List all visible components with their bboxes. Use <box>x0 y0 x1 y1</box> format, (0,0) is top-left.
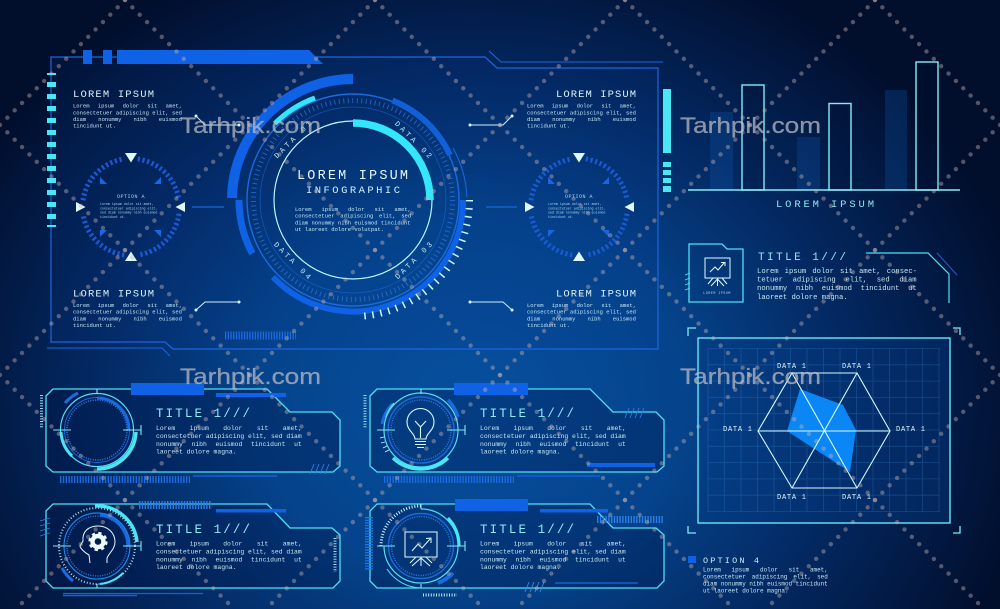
bottom hatch <box>225 332 296 340</box>
legend: option 4: consectetuer adipiscing elit, sed <box>703 574 828 580</box>
card 2 text: TITLE 1/// <box>156 523 250 537</box>
left tick column <box>47 73 56 227</box>
title and text: TITLE 1/// <box>758 252 846 264</box>
card 2 <box>40 504 340 596</box>
dial: option A left <box>76 153 185 261</box>
text block: top left: diam nonummy nibh euismod <box>73 116 182 123</box>
text block: top right <box>527 89 636 130</box>
card 2 text: Lorem ipsum dolor sit amet, <box>156 541 302 548</box>
dial triangles <box>525 153 634 261</box>
card 1 text: nonummy nibh euismod tincidunt ut <box>156 441 302 448</box>
legend: option 4: diam nonummy nibh euismod tincidunt <box>703 581 828 588</box>
icon: presentation board <box>405 532 437 566</box>
text block: bottom left: LOREM IPSUM <box>73 288 154 300</box>
card 1 dial <box>53 389 141 469</box>
card 3 text: Lorem ipsum dolor sit amet, <box>480 425 626 432</box>
watermark text: Tarhpik.com <box>680 364 821 389</box>
radar labels: DATA 1 <box>842 494 871 502</box>
card 3 text: laoreet dolore magna. <box>480 448 561 456</box>
title and text: nonummy nibh euismod tincidunt ut <box>757 285 917 293</box>
central circular gauge: INFOGRAPHIC <box>306 185 400 197</box>
gauge body text: ut laoreet dolore volutpat. <box>295 226 384 233</box>
card 3 text <box>480 407 626 456</box>
title and text: laoreet dolore magna. <box>757 294 848 302</box>
dial: option A right: tincidunt ut. <box>548 215 574 219</box>
card 2 text: nonummy nibh euismod tincidunt ut <box>156 556 302 563</box>
panel: main HUD frame <box>47 50 671 356</box>
dial: option A left: Lorem ipsum dolor sit amet, <box>100 202 153 206</box>
text block: bottom left: Lorem ipsum dolor sit amet, <box>73 302 182 309</box>
dial: option A right: OPTION A <box>565 194 593 200</box>
radar data shape <box>787 389 856 472</box>
text block: top right: diam nonummy nibh euismod <box>527 116 636 123</box>
central circular gauge <box>232 79 470 316</box>
legend: option 4: ut laoreet dolore magna. <box>703 588 789 595</box>
dim bars <box>710 90 907 190</box>
dial: option A left: sed diam nonummy nibh euismod <box>100 210 157 214</box>
gauge data labels: DATA 04 <box>271 241 312 282</box>
gauge body text <box>295 206 411 233</box>
outlined bars <box>742 62 938 190</box>
radar labels: DATA 1 <box>842 363 871 371</box>
card 1 text: TITLE 1/// <box>156 407 250 421</box>
title and text: tetuer adipiscing elit, sed diam <box>757 277 917 285</box>
dial: option A right: consectetuer adipiscing elit, <box>548 206 605 210</box>
card 2 dial <box>53 506 141 588</box>
connector lines <box>192 114 517 312</box>
card 1 text: consectetuer adipiscing elit, sed diam <box>156 433 302 440</box>
legend: option 4: OPTION 4 <box>703 556 759 566</box>
text block: bottom left <box>73 288 182 329</box>
card 4 <box>369 499 664 595</box>
legend: option 4 <box>688 556 828 595</box>
dial triangles <box>76 153 185 261</box>
text block: bottom right: Lorem ipsum dolor sit amet, <box>527 302 636 309</box>
radar labels: DATA 1 <box>777 494 806 502</box>
card 3 text: nonummy nibh euismod tincidunt ut <box>480 441 626 448</box>
dial: option A left: tincidunt ut. <box>100 215 126 219</box>
top blue bars <box>83 50 323 64</box>
watermark text: Tarhpik.com <box>180 364 321 389</box>
card 3 text: TITLE 1/// <box>480 407 574 421</box>
dial: option A right: sed diam nonummy nibh euismod <box>548 210 605 214</box>
text block: bottom right: tincidunt ut. <box>527 322 570 329</box>
text block: top right: Lorem ipsum dolor sit amet, <box>527 103 636 110</box>
radar labels: DATA 1 <box>777 363 806 371</box>
card 3 text: consectetuer adipiscing elit, sed diam <box>480 433 626 440</box>
gauge data labels: DATA 03 <box>394 241 435 282</box>
card 3 dial <box>377 389 465 469</box>
text block: top left: consectetuer adipiscing elit, sed <box>73 109 182 116</box>
text block: bottom left: consectetuer adipiscing elit, sed <box>73 309 182 316</box>
card 3 <box>365 383 664 480</box>
frame outline <box>51 57 658 349</box>
card 1 <box>42 383 340 480</box>
text block: bottom right <box>527 288 636 329</box>
dial: option A right <box>525 153 634 261</box>
icon box <box>685 244 743 302</box>
text block: bottom right: consectetuer adipiscing elit, sed <box>527 309 636 316</box>
radar labels <box>723 363 925 502</box>
text block: bottom right: LOREM IPSUM <box>556 288 636 300</box>
gauge body text: Lorem ipsum dolor sit amet, <box>295 206 411 213</box>
card 4 text: Lorem ipsum dolor sit amet, <box>480 541 626 548</box>
title and text <box>757 252 917 302</box>
gauge data labels: DATA 01 <box>273 120 314 161</box>
watermark text <box>180 113 821 389</box>
gauge body text: consectetuer adipiscing elit, sed <box>295 213 411 220</box>
radar chart panel <box>688 328 960 533</box>
card 4 text: consectetuer adipiscing elit, sed diam <box>480 548 626 556</box>
watermark text: Tarhpik.com <box>680 113 821 138</box>
legend: option 4: Lorem ipsum dolor sit amet, <box>703 566 828 574</box>
title and text: Lorem ipsum dolor sit amet, consec- <box>757 268 917 276</box>
dial: option A right: Lorem ipsum dolor sit amet, <box>548 202 601 206</box>
card 2 text <box>156 523 302 571</box>
text block: top left: LOREM IPSUM <box>73 89 154 101</box>
text block: bottom left: tincidunt ut. <box>73 322 116 329</box>
card 2 text: consectetuer adipiscing elit, sed diam <box>156 548 302 556</box>
card 4 text: laoreet dolore magna. <box>480 564 561 571</box>
text block: top left: Lorem ipsum dolor sit amet, <box>73 103 182 110</box>
card 1 text <box>156 407 302 456</box>
radar labels: DATA 1 <box>896 426 925 434</box>
icon box: LOREM IPSUM <box>703 292 731 296</box>
watermark text: Tarhpik.com <box>180 113 321 138</box>
gauge data labels: DATA 02 <box>392 120 433 161</box>
card 4 text: nonummy nibh euismod tincidunt ut <box>480 556 626 563</box>
text block: top right: tincidunt ut. <box>527 123 570 130</box>
card 2 text: laoreet dolore magna. <box>156 564 237 571</box>
text block: top right: consectetuer adipiscing elit, sed <box>527 109 636 116</box>
gauge title: LOREM IPSUM <box>297 169 408 184</box>
card 4 dial <box>377 504 465 588</box>
card 1 text: laoreet dolore magna. <box>156 448 237 456</box>
dial: option A left: OPTION A <box>117 194 145 200</box>
radar labels: DATA 1 <box>723 426 752 434</box>
card 4 text <box>480 523 626 571</box>
gauge body text: diam nonummy nibh euismod tincidunt <box>295 219 411 226</box>
text block: top left: tincidunt ut. <box>73 123 116 130</box>
card 4 text: TITLE 1/// <box>480 523 574 537</box>
dial: option A left: consectetuer adipiscing elit, <box>100 206 157 210</box>
icon: head with gear <box>80 526 115 563</box>
icon: light bulb <box>407 408 434 448</box>
gauge data labels <box>271 120 435 282</box>
bar chart: LOREM IPSUM <box>776 199 874 211</box>
text block: bottom right: diam nonummy nibh euismod <box>527 315 636 322</box>
text block: top right: LOREM IPSUM <box>556 89 636 101</box>
radar hexagon <box>758 373 890 488</box>
card 1 text: Lorem ipsum dolor sit amet, <box>156 425 302 432</box>
text block: bottom left: diam nonummy nibh euismod <box>73 315 182 322</box>
text block: top left <box>73 89 182 130</box>
right bars <box>663 89 671 192</box>
panel: title with icon box <box>685 244 957 303</box>
bar chart <box>688 62 960 211</box>
